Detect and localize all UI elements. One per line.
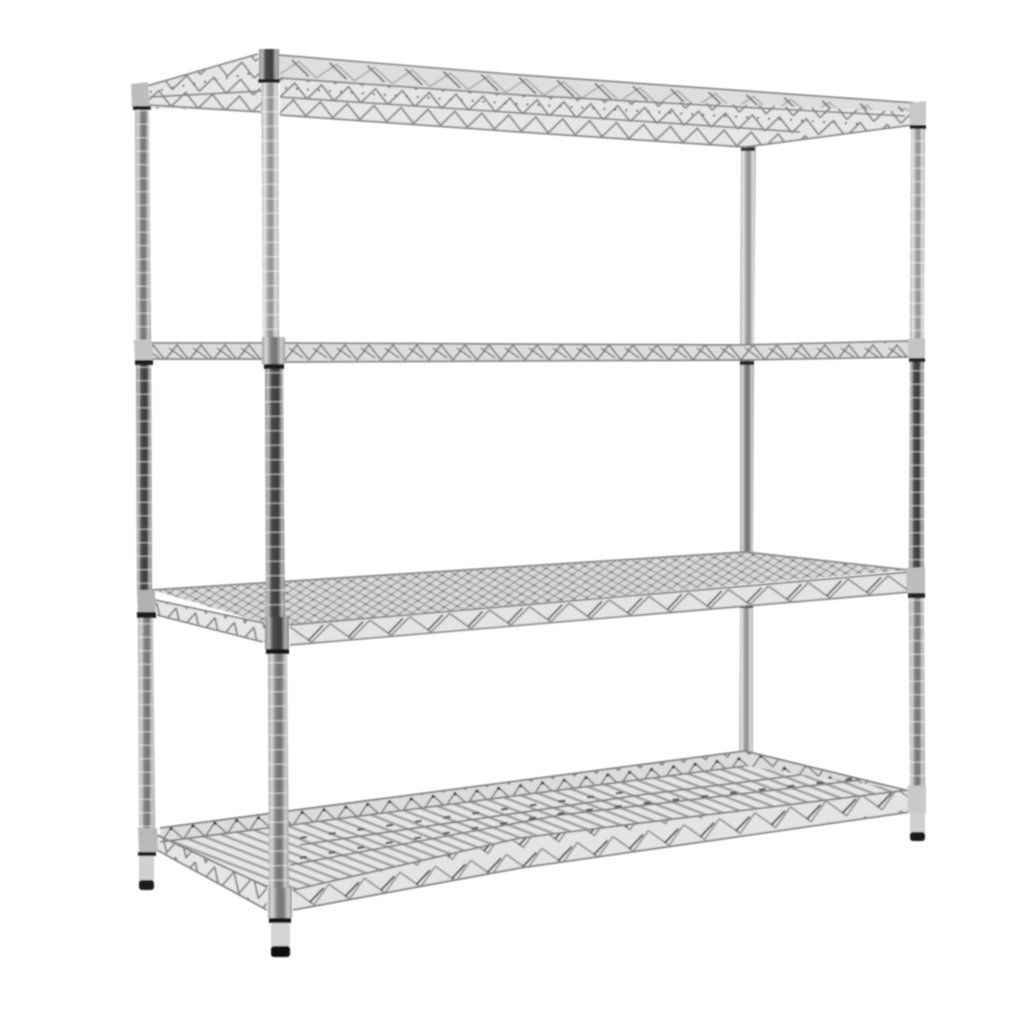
third shelf wire deck (152, 552, 908, 625)
third shelf (152, 552, 910, 645)
left foot (139, 856, 154, 881)
left post (131, 82, 158, 890)
front post (258, 49, 292, 957)
back post (739, 135, 756, 775)
right post (906, 101, 926, 841)
third shelf front band (290, 572, 910, 645)
bottom shelf front band (293, 790, 910, 910)
bottom shelf rails (157, 751, 910, 910)
third shelf left side band (155, 600, 265, 642)
right post grooves (917, 127, 918, 786)
second shelf rails (148, 341, 910, 362)
right post collars (909, 101, 926, 125)
left post grooves (143, 110, 146, 830)
top shelf (140, 54, 915, 147)
third shelf rails (152, 552, 910, 645)
top shelf upper wire band (278, 55, 915, 112)
front foot (271, 923, 290, 947)
front post collars (262, 337, 285, 365)
bottom shelf (157, 751, 910, 910)
bottom shelf wire deck (160, 765, 905, 890)
bottom shelf dotted cross wires (300, 778, 860, 858)
right foot (910, 813, 925, 833)
second shelf left band (148, 343, 264, 360)
bottom shelf back band (160, 751, 905, 842)
top shelf dotted cross wires (150, 72, 860, 124)
top shelf rails (140, 54, 915, 147)
left post collars (131, 82, 150, 108)
bottom shelf left side band (157, 835, 267, 910)
second shelf long band (285, 341, 910, 362)
second shelf (148, 341, 910, 362)
top shelf left side panel (140, 54, 262, 112)
top shelf lower zigzag band (280, 78, 915, 147)
front post top sleeve (259, 49, 279, 80)
front post grooves (270, 82, 279, 890)
